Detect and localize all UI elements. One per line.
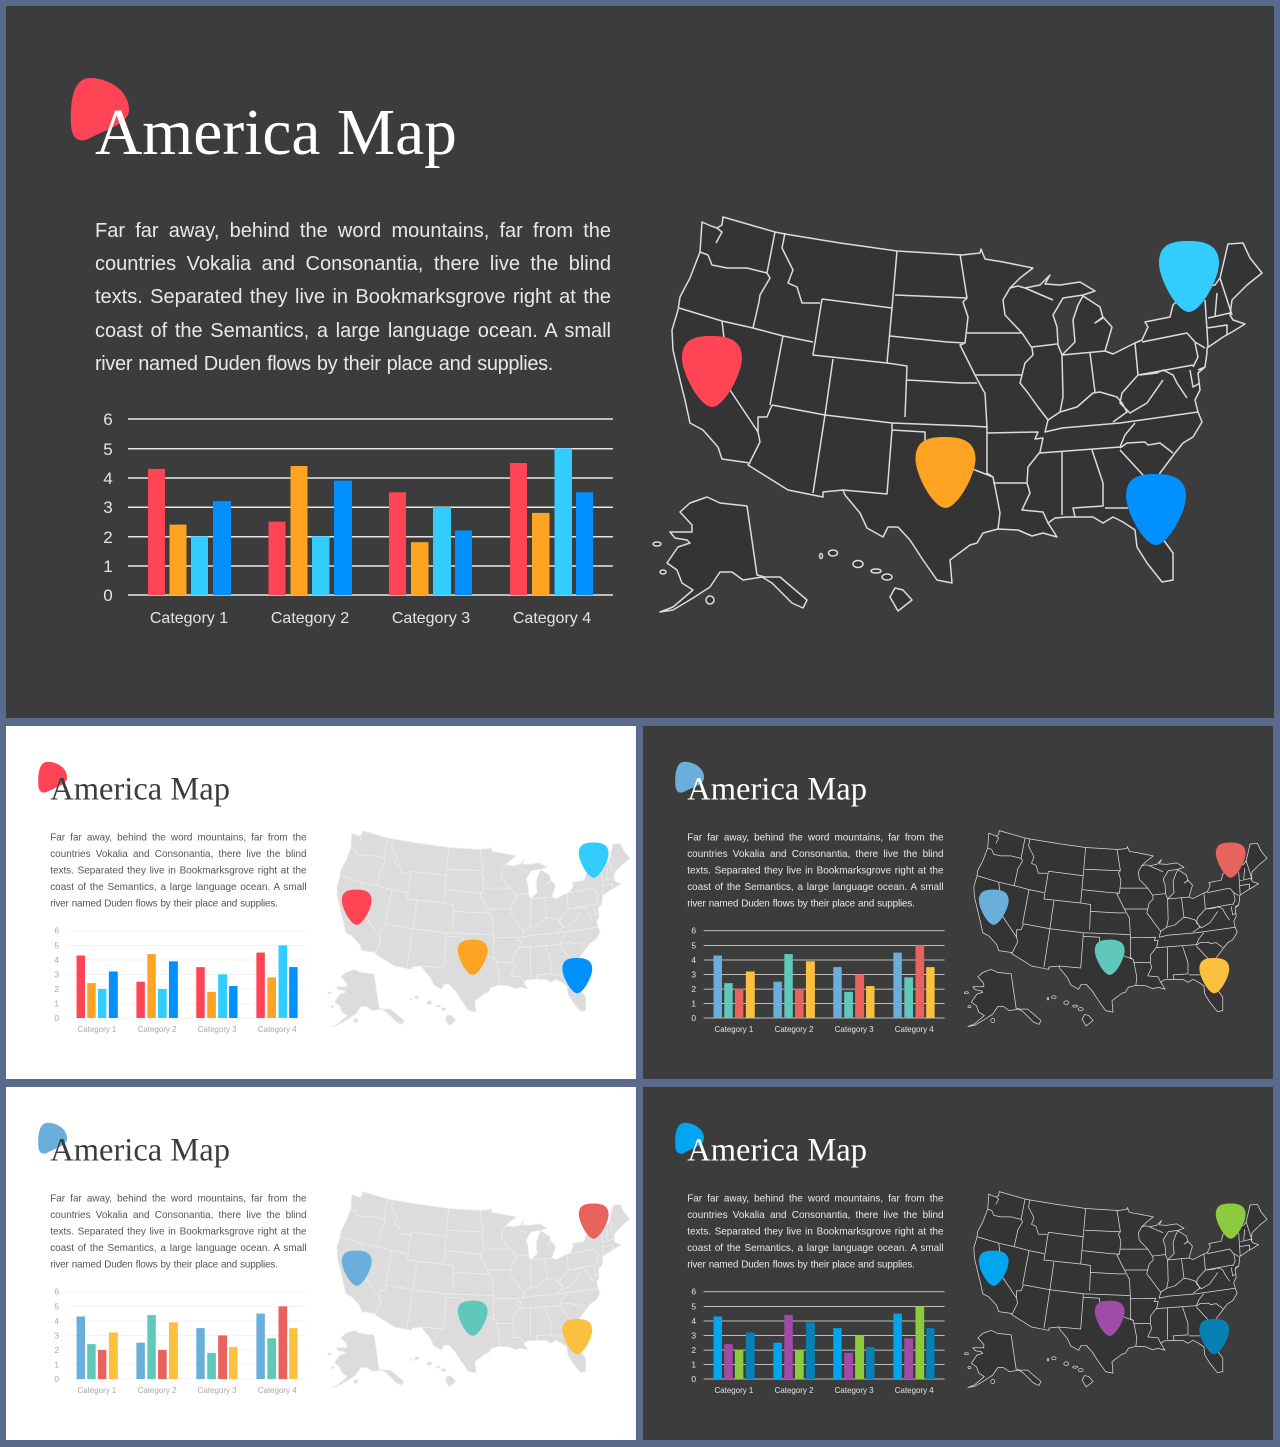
bar chart: 2	[54, 984, 59, 994]
bar chart	[54, 1287, 308, 1395]
bar chart: 3	[54, 1330, 59, 1340]
bar chart: Category 1	[714, 1386, 754, 1395]
text block: countries Vokalia and Consonantia, there live the blind	[50, 1209, 307, 1220]
bar chart: 2	[691, 1345, 696, 1355]
text block: countries Vokalia and Consonantia, there live the blind	[687, 1209, 944, 1220]
bar chart: 3	[54, 969, 59, 979]
bar chart: 2	[103, 528, 113, 547]
text block: texts. Separated they live in Bookmarksgrove right at the	[687, 1226, 944, 1237]
map: United States with pins	[652, 216, 1263, 613]
icon: title blob	[675, 762, 704, 793]
text block: river named Duden flows by their place and supplies.	[687, 1259, 915, 1270]
text block: countries Vokalia and Consonantia, there live the blind	[50, 848, 307, 859]
text block: river named Duden flows by their place and supplies.	[95, 353, 553, 375]
bar chart: 5	[691, 1302, 696, 1312]
text block: texts. Separated they live in Bookmarksgrove right at the	[95, 286, 611, 308]
bar chart: 5	[691, 941, 696, 951]
bar chart: Category 2	[775, 1025, 814, 1034]
bar chart: 4	[691, 955, 696, 965]
bar chart: 6	[54, 1287, 59, 1297]
icon: title blob	[675, 1122, 704, 1154]
panel: main dark slide	[6, 6, 1274, 718]
text block: coast of the Semantics, a large language ocean. A small	[95, 320, 611, 342]
icon: title blob	[38, 1122, 68, 1154]
bar chart: 4	[691, 1316, 696, 1326]
bar chart: 2	[691, 984, 696, 994]
icon: title blob	[38, 762, 68, 793]
bar chart: Category 4	[258, 1386, 297, 1395]
title: America Map	[50, 1132, 230, 1168]
text block: texts. Separated they live in Bookmarksgrove right at the	[50, 865, 307, 876]
bar chart: Category 2	[271, 610, 349, 627]
text block: texts. Separated they live in Bookmarksgrove right at the	[687, 865, 944, 876]
bar chart: Category 1	[150, 610, 228, 627]
bar chart: 1	[691, 999, 696, 1009]
bar chart: 6	[103, 410, 113, 429]
map: United States with pins	[327, 1192, 630, 1388]
bar chart: Category 3	[198, 1386, 237, 1395]
bar chart: 6	[54, 926, 59, 936]
bar chart: 0	[54, 1374, 59, 1384]
text block: countries Vokalia and Consonantia, there live the blind	[95, 253, 611, 275]
text block: countries Vokalia and Consonantia, there live the blind	[687, 848, 944, 859]
bar chart: 3	[691, 1330, 696, 1340]
bar chart: 4	[54, 1316, 59, 1326]
map: United States with pins	[964, 1191, 1268, 1388]
bar chart: Category 4	[258, 1025, 297, 1034]
panel: dark slide, pastel palette	[643, 726, 1273, 1079]
map: United States with pins	[327, 830, 630, 1027]
bar chart: 6	[691, 926, 696, 936]
bar chart: 0	[691, 1013, 696, 1023]
title: America Map	[50, 771, 230, 807]
title: America Map	[687, 771, 867, 807]
bar chart: Category 3	[198, 1025, 237, 1034]
text block: river named Duden flows by their place and supplies.	[50, 1259, 278, 1270]
text block	[687, 1193, 944, 1270]
text block: river named Duden flows by their place and supplies.	[50, 898, 278, 909]
title: America Map	[687, 1132, 867, 1168]
text block	[687, 832, 944, 909]
text block: Far far away, behind the word mountains, far from the	[50, 1193, 307, 1204]
bar chart: 0	[54, 1013, 59, 1023]
panel: white slide, warm palette	[6, 726, 636, 1079]
text block: river named Duden flows by their place and supplies.	[687, 898, 915, 909]
bar chart: 5	[54, 941, 59, 951]
text block: texts. Separated they live in Bookmarksgrove right at the	[50, 1226, 307, 1237]
bar chart: 3	[103, 498, 113, 517]
text block: coast of the Semantics, a large language ocean. A small	[687, 882, 944, 892]
bar chart: Category 3	[835, 1386, 874, 1395]
bar chart: Category 3	[392, 610, 470, 627]
text block: Far far away, behind the word mountains, far from the	[687, 832, 944, 843]
bar chart	[103, 410, 613, 627]
bar chart	[691, 1287, 945, 1395]
bar chart: 1	[103, 557, 113, 576]
bar chart: 1	[54, 1360, 59, 1370]
title: America Map	[95, 97, 457, 169]
map: United States with pins	[964, 830, 1268, 1027]
bar chart: Category 1	[77, 1386, 117, 1395]
bar chart: Category 1	[714, 1025, 754, 1034]
panel: dark slide, vivid palette	[643, 1087, 1273, 1440]
icon: title blob	[70, 78, 129, 140]
bar chart: Category 4	[895, 1386, 934, 1395]
panel: white slide, pastel palette	[6, 1087, 636, 1440]
text block: coast of the Semantics, a large language ocean. A small	[50, 882, 307, 892]
bar chart: 0	[691, 1374, 696, 1384]
bar chart: 2	[54, 1345, 59, 1355]
text block: coast of the Semantics, a large language ocean. A small	[50, 1243, 307, 1253]
bar chart: 6	[691, 1287, 696, 1297]
bar chart: 4	[103, 469, 113, 488]
text block: coast of the Semantics, a large language ocean. A small	[687, 1243, 944, 1253]
text block: Far far away, behind the word mountains, far from the	[95, 220, 611, 242]
text block	[50, 1193, 307, 1270]
bar chart: 5	[54, 1302, 59, 1312]
text block	[95, 220, 611, 375]
bar chart: 3	[691, 969, 696, 979]
bar chart: Category 4	[513, 610, 591, 627]
bar chart: 4	[54, 955, 59, 965]
bar chart: Category 1	[77, 1025, 117, 1034]
bar chart: Category 2	[138, 1386, 177, 1395]
bar chart: Category 3	[835, 1025, 874, 1034]
bar chart: 1	[691, 1360, 696, 1370]
bar chart: Category 2	[775, 1386, 814, 1395]
bar chart	[54, 926, 308, 1034]
text block	[50, 832, 307, 909]
text block: Far far away, behind the word mountains, far from the	[687, 1193, 944, 1204]
bar chart: 1	[54, 999, 59, 1009]
text block: Far far away, behind the word mountains, far from the	[50, 832, 307, 843]
bar chart: Category 4	[895, 1025, 934, 1034]
bar chart	[691, 926, 945, 1034]
bar chart: 0	[103, 586, 113, 605]
bar chart: 5	[103, 440, 113, 459]
bar chart: Category 2	[138, 1025, 177, 1034]
